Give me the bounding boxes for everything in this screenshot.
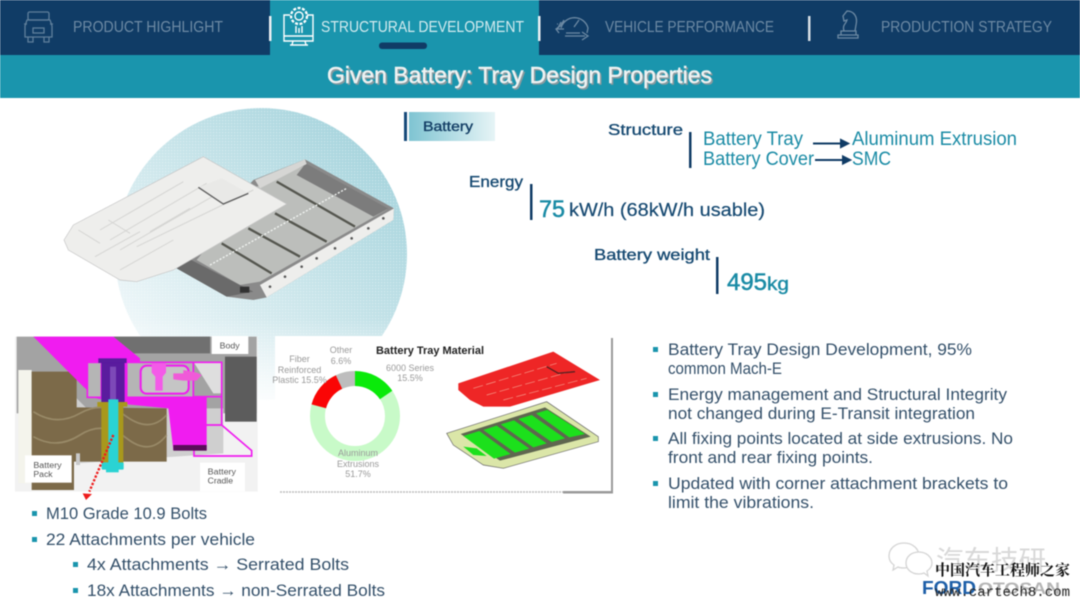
watermark: account name: 汽车技研 <box>936 546 1046 576</box>
label: body: Body <box>220 341 240 350</box>
watermark <box>889 543 1070 601</box>
spec: structure: Battery Tray <box>703 129 803 150</box>
watermark: site name: 中国汽车工程师之家 <box>935 559 1070 580</box>
text block: right bullet list: common Mach-E <box>668 360 782 378</box>
nav label: product highlight: PRODUCT HIGHLIGHT <box>73 19 223 36</box>
text block: right bullet list: limit the vibrations. <box>668 494 814 512</box>
text block: left bullet list: 4x Attachments → Serrated Bolts <box>87 556 349 574</box>
text block: right bullet list: Battery Tray Design Development, 95% <box>668 341 972 359</box>
chart labels: 6.6% <box>331 356 351 366</box>
chart labels: Aluminum <box>338 448 378 458</box>
spec: battery weight: kg <box>767 274 789 294</box>
chart labels: Fiber <box>289 354 310 364</box>
arrow: red dotted leader <box>83 435 113 500</box>
title: Given Battery: Tray Design Properties <box>327 62 712 88</box>
spec: structure: Structure <box>608 122 683 139</box>
icon: speedometer <box>556 18 588 40</box>
watermark: FORD OTOSAN: FORD <box>922 578 976 598</box>
spec: energy: kW/h (68kW/h usable) <box>569 200 765 220</box>
chart labels <box>272 345 435 479</box>
text block: right bullet list: not changed during E-Transit integration <box>668 405 975 423</box>
chart heading: Battery Tray Material <box>376 345 484 357</box>
text block: right bullet list <box>653 341 1013 512</box>
battery cover <box>64 157 287 282</box>
chart labels: 15.5% <box>397 373 423 383</box>
decorative teal circle <box>114 108 408 400</box>
text block: right bullet list: Energy management and Structural Integrity <box>668 386 1008 404</box>
label: battery pack: Pack <box>33 470 53 479</box>
nav label: vehicle performance: VEHICLE PERFORMANCE <box>605 19 774 36</box>
spec: structure: SMC <box>852 149 891 170</box>
spec: energy: Energy <box>469 174 523 191</box>
label: battery cradle: Cradle <box>208 476 234 485</box>
chart labels: 6000 Series <box>386 363 435 373</box>
active tab indicator <box>379 42 427 49</box>
chart labels: 51.7% <box>345 469 371 479</box>
title band <box>0 55 1080 98</box>
watermark: url: www.cartech8.com <box>935 585 1070 601</box>
text block: left bullet list: 22 Attachments per vehicle <box>46 531 255 549</box>
text block: right bullet list: Updated with corner attachment brackets to <box>668 475 1008 493</box>
donut chart <box>318 378 392 454</box>
navigation bar <box>0 0 1080 55</box>
text block: right bullet list: front and rear fixing points. <box>668 449 873 467</box>
spec: energy: 75 <box>539 196 565 223</box>
label: battery pack <box>25 455 72 483</box>
panel: battery tray material <box>272 336 613 494</box>
battery label <box>404 112 495 141</box>
nav label: structural development: STRUCTURAL DEVELOPMENT <box>321 19 524 36</box>
icon: truck <box>24 12 53 42</box>
chart labels: Extrusions <box>337 459 380 469</box>
illustration: red cover and green tray <box>447 352 600 468</box>
spec: battery weight <box>594 247 789 296</box>
spec: structure: Battery Cover <box>703 149 815 170</box>
spec: structure: Aluminum Extrusion <box>852 129 1017 150</box>
illustration: bolt cross-section <box>15 336 258 500</box>
spec: battery weight: 495 <box>727 269 767 296</box>
icon: chat bubbles <box>889 543 932 576</box>
battery tray <box>177 159 394 300</box>
chart labels: Plastic 15.5% <box>272 375 327 385</box>
chart labels: Reinforced <box>278 365 321 375</box>
icon: chess knight <box>838 11 858 38</box>
label: battery cradle: Battery <box>208 467 236 476</box>
watermark: FORD OTOSAN: OTOSAN <box>978 579 1060 598</box>
watermark: FORD OTOSAN <box>922 578 1060 598</box>
text block: right bullet list: All fixing points located at side extrusions. No <box>668 430 1013 448</box>
text block: left bullet list: M10 Grade 10.9 Bolts <box>46 505 207 523</box>
label: body <box>212 336 248 354</box>
text block: left bullet list <box>32 505 385 600</box>
spec: battery weight: Battery weight <box>594 247 711 264</box>
nav label: production strategy: PRODUCTION STRATEGY <box>881 19 1052 36</box>
arrow: cover to SMC <box>815 156 850 164</box>
icon: gear on monitor <box>284 8 313 45</box>
spec: energy <box>469 174 765 223</box>
label: battery cradle <box>200 463 245 491</box>
arrow: tray to extrusion <box>813 140 848 147</box>
spec: structure <box>608 122 1017 170</box>
illustration: battery tray and cover <box>64 157 394 300</box>
label: battery pack: Battery <box>33 461 62 470</box>
battery label: Battery <box>423 118 473 134</box>
text block: left bullet list: 18x Attachments → non-Serrated Bolts <box>87 582 385 600</box>
title band: Given Battery: Tray Design Properties <box>328 64 714 90</box>
chart labels: Other <box>330 345 352 355</box>
